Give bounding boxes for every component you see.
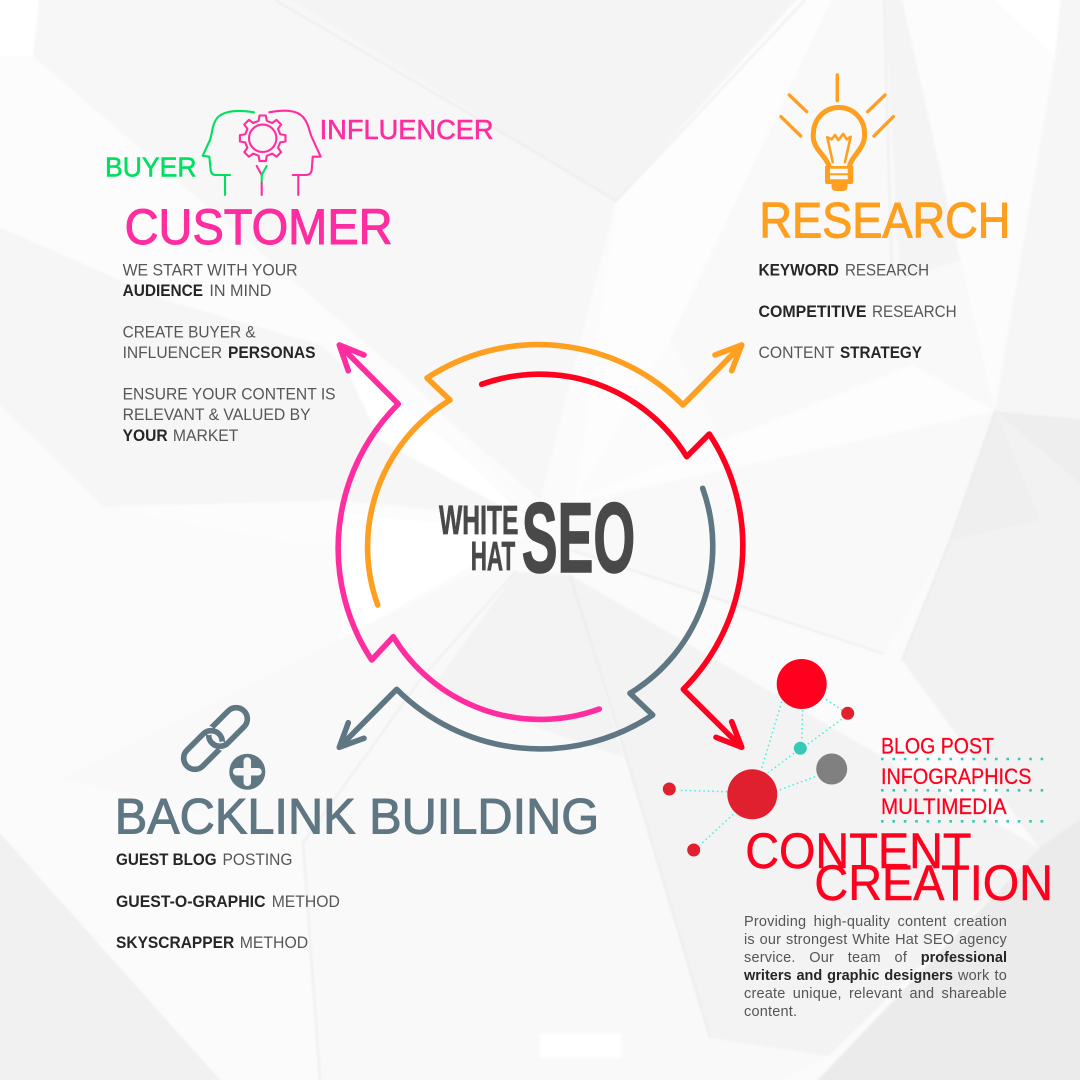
text block: backlink points: GUEST BLOG [116, 850, 217, 869]
text block: backlink points: METHOD [240, 933, 308, 952]
text block: content creation description: writers and graphic designers work to [744, 968, 1007, 984]
icon: buyer and influencer heads with gear [203, 111, 321, 195]
text block: customer points: INFLUENCER [123, 343, 222, 362]
text block: customer points: CREATE BUYER & [123, 323, 256, 342]
logo: white hat seo: SEO [522, 482, 635, 593]
text block: backlink points: GUEST-O-GRAPHIC [116, 892, 266, 911]
text block: backlink points [116, 850, 340, 952]
list: content types: MULTIMEDIA [881, 794, 1007, 819]
text block: content creation description: create unique, relevant and shareable [744, 986, 1007, 1002]
text block: customer points: AUDIENCE [123, 281, 203, 300]
heading: content creation: CONTENT [745, 823, 972, 879]
list: content types [881, 734, 1045, 821]
heading: backlink building: BACKLINK BUILDING [115, 789, 599, 845]
text block: customer points: PERSONAS [228, 343, 316, 362]
arrow: orange to research [368, 345, 742, 605]
text block: backlink points: POSTING [222, 850, 292, 869]
text block: content creation description: service. Our team of professional [744, 950, 1007, 966]
logo: white hat seo [439, 482, 635, 593]
heading: customer: CUSTOMER [125, 199, 393, 255]
text block: customer points: ENSURE YOUR CONTENT IS [123, 385, 336, 404]
list: content types: BLOG POST [881, 734, 994, 758]
text block: backlink points: SKYSCRAPPER [116, 933, 234, 952]
icon: content network of dots [663, 659, 854, 856]
text block: research points: CONTENT [758, 343, 834, 362]
text block: research points: COMPETITIVE [758, 302, 866, 321]
text block: research points: STRATEGY [840, 343, 923, 362]
arrow: slate to backlink building [339, 488, 713, 749]
text block: customer points: YOUR [123, 426, 168, 445]
logo: white hat seo: HAT [471, 533, 515, 579]
text block: customer points [123, 261, 336, 445]
heading: content creation: CREATION [814, 855, 1053, 911]
text block: backlink points: METHOD [272, 892, 340, 911]
central cycle of four arrows [338, 345, 743, 749]
icon: light bulb [781, 75, 893, 191]
heading: research: RESEARCH [759, 193, 1010, 249]
text block: research points [758, 261, 957, 362]
text block: customer points: IN MIND [209, 281, 271, 300]
icon: chain link with plus [179, 703, 265, 790]
text block: content creation description [744, 914, 1007, 1020]
text block: research points: RESEARCH [845, 261, 929, 280]
text block: content creation description: is our strongest White Hat SEO agency [744, 932, 1007, 948]
text block: content creation description: Providing high-quality content creation [744, 914, 1007, 930]
text block: customer points: MARKET [173, 426, 238, 445]
text block: customer points: RELEVANT & VALUED BY [123, 405, 311, 424]
label: influencer: INFLUENCER [320, 114, 494, 145]
label: buyer: BUYER [105, 151, 196, 182]
text block: content creation description: content. [744, 1004, 797, 1020]
text block: research points: KEYWORD [758, 261, 839, 280]
text block: customer points: WE START WITH YOUR [123, 261, 298, 280]
list: content types: INFOGRAPHICS [881, 764, 1031, 789]
arrow: pink to customer [338, 345, 599, 719]
heading: content creation [745, 823, 1053, 911]
text block: research points: RESEARCH [872, 302, 957, 321]
arrow: red to content creation [482, 374, 743, 747]
logo: white hat seo: WHITE [439, 497, 518, 543]
